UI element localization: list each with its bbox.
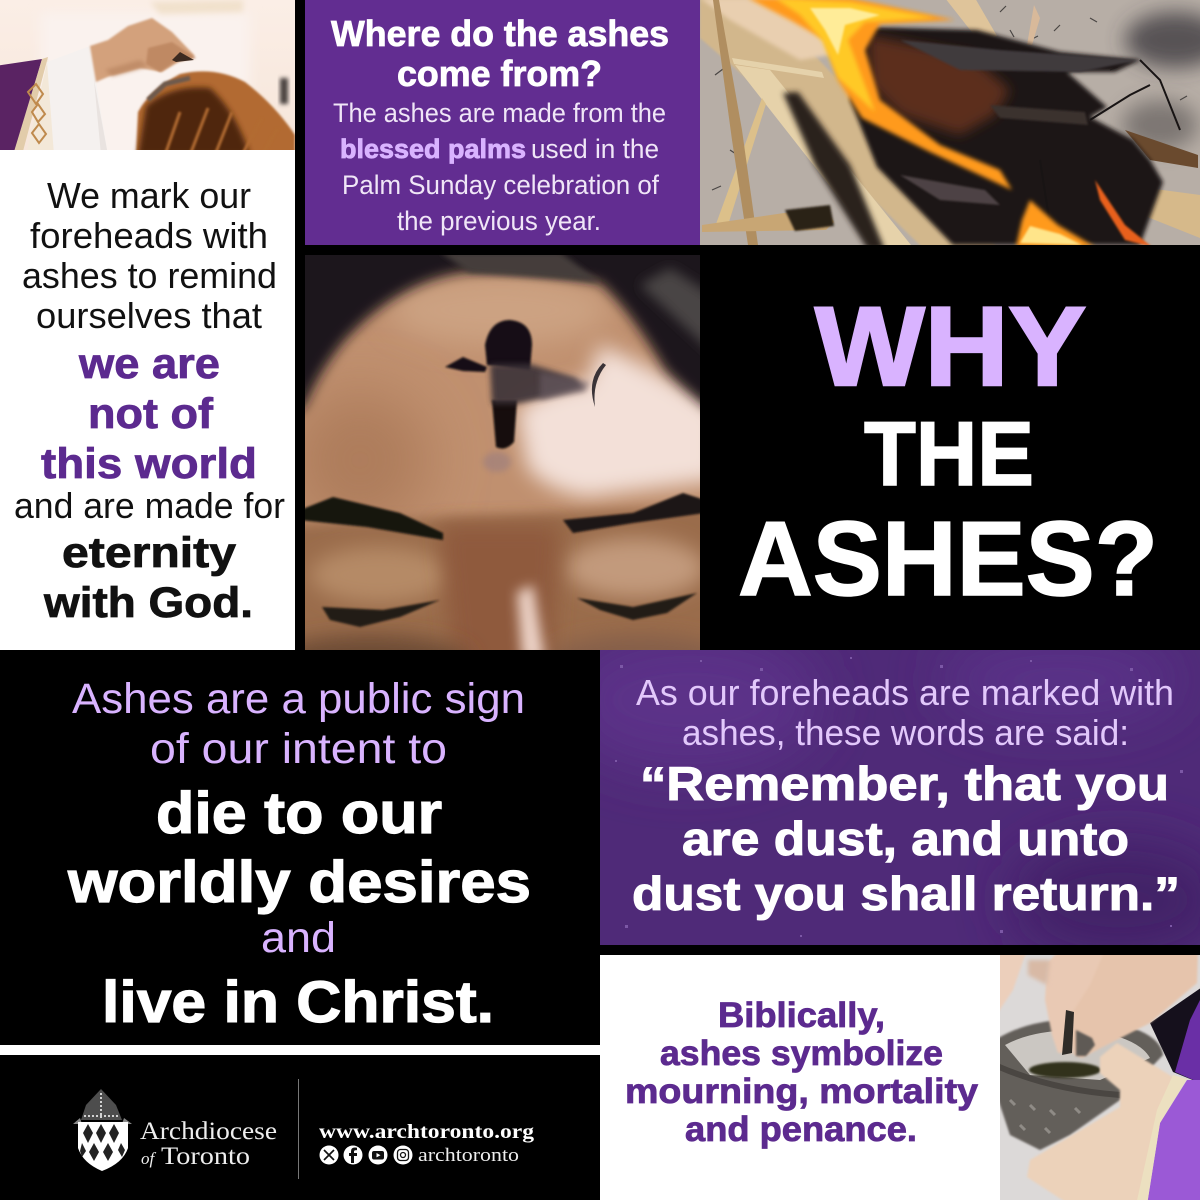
text block: public sign: of our intent to xyxy=(150,725,447,773)
title: why the ashes xyxy=(738,284,1158,618)
hair xyxy=(136,71,295,155)
text block: public sign: worldly desires xyxy=(67,850,531,915)
panel: white text block: we are xyxy=(78,340,220,388)
text block: public sign: and xyxy=(261,914,336,962)
photo: priest marking head with ashes xyxy=(0,0,295,162)
divider line xyxy=(298,1079,299,1179)
panel: where do the ashes come from: The ashes are made from the xyxy=(333,98,666,128)
jar xyxy=(995,1019,1163,1150)
panel: biblically: mourning, mortality xyxy=(625,1072,979,1111)
logo: archdiocese of toronto xyxy=(73,1089,277,1171)
text block: public sign: die to our xyxy=(156,781,442,846)
logo: archdiocese of toronto: of xyxy=(141,1149,156,1168)
panel: biblically: Biblically, xyxy=(718,996,885,1035)
purple sleeve xyxy=(1147,1080,1200,1200)
panel: white text block: not of xyxy=(88,390,214,438)
panel: where do the ashes come from: Where do the ashes xyxy=(331,13,669,54)
ash cross xyxy=(445,320,606,472)
divider bar: white xyxy=(0,1045,600,1055)
panel: biblically: ashes symbolize xyxy=(660,1034,943,1073)
panel: white text block: ashes to remind xyxy=(22,255,277,296)
lower face xyxy=(305,503,700,650)
text block: public sign: Ashes are a public sign xyxy=(72,675,525,723)
panel: where do the ashes come from: blessed palms xyxy=(340,134,526,164)
icon: facebook xyxy=(344,1146,362,1164)
panel: words said with quote: dust you shall return.” xyxy=(632,867,1180,920)
icon: coat of arms xyxy=(73,1089,132,1171)
panel: white text block: foreheads with xyxy=(30,215,268,256)
panel: where do the ashes come from: the previous year. xyxy=(397,206,601,236)
panel: biblically: and penance. xyxy=(685,1110,917,1149)
panel: words said with quote: ashes, these words are said: xyxy=(682,712,1129,753)
panel: where do the ashes come from: Palm Sunday celebration of xyxy=(342,170,659,200)
icon: youtube xyxy=(368,1146,388,1164)
contact: website and socials: www.archtoronto.org xyxy=(319,1121,534,1143)
logo: archdiocese of toronto: Toronto xyxy=(161,1143,250,1170)
icon: x xyxy=(320,1146,338,1164)
panel: words said with quote: are dust, and unto xyxy=(682,812,1129,865)
panel: where do the ashes come from: used in the xyxy=(531,134,659,164)
contact: website and socials xyxy=(319,1121,534,1166)
hand xyxy=(90,18,195,82)
panel: white text block: eternity xyxy=(62,529,236,577)
eye lashes xyxy=(322,600,440,627)
logo: archdiocese of toronto: Archdiocese xyxy=(140,1118,277,1145)
icon: instagram xyxy=(394,1146,412,1164)
photo: forehead with ash cross xyxy=(305,255,700,650)
photo: burning palms xyxy=(700,0,1200,250)
panel: where do the ashes come from: come from? xyxy=(397,53,602,94)
panel: words said with quote: “Remember, that you xyxy=(640,757,1169,810)
panel: white text block: ourselves that xyxy=(36,295,262,336)
panel: white text block: We mark our xyxy=(47,175,251,216)
photo: hands with ash jar xyxy=(995,950,1200,1200)
panel: words said with quote xyxy=(600,650,1200,945)
panel: where do the ashes come from xyxy=(305,0,700,245)
panel: words said with quote: As our foreheads are marked with xyxy=(636,672,1174,713)
charred mass xyxy=(850,27,1163,245)
hair xyxy=(305,255,700,418)
panel: white text block xyxy=(0,150,295,650)
text block: public sign xyxy=(67,675,531,1035)
text block: public sign: live in Christ. xyxy=(102,970,494,1035)
title: why the ashes: ASHES? xyxy=(738,500,1158,618)
panel: white text block: and are made for xyxy=(14,485,285,526)
lower hand xyxy=(1027,1043,1173,1200)
flames xyxy=(748,0,1012,190)
vestment xyxy=(0,59,42,155)
title: why the ashes: WHY xyxy=(815,284,1086,409)
panel: white text block: with God. xyxy=(43,579,253,627)
palm stalks xyxy=(700,0,1000,250)
upper hand xyxy=(1073,955,1199,1058)
panel: biblically xyxy=(600,955,1000,1200)
panel: white text block: this world xyxy=(41,440,257,488)
contact: website and socials: archtoronto xyxy=(418,1145,519,1166)
ground: ash smudges xyxy=(1125,12,1200,68)
bright skin on right forehead xyxy=(517,345,720,497)
eyebrows xyxy=(300,497,443,540)
title: why the ashes: THE xyxy=(864,404,1034,505)
